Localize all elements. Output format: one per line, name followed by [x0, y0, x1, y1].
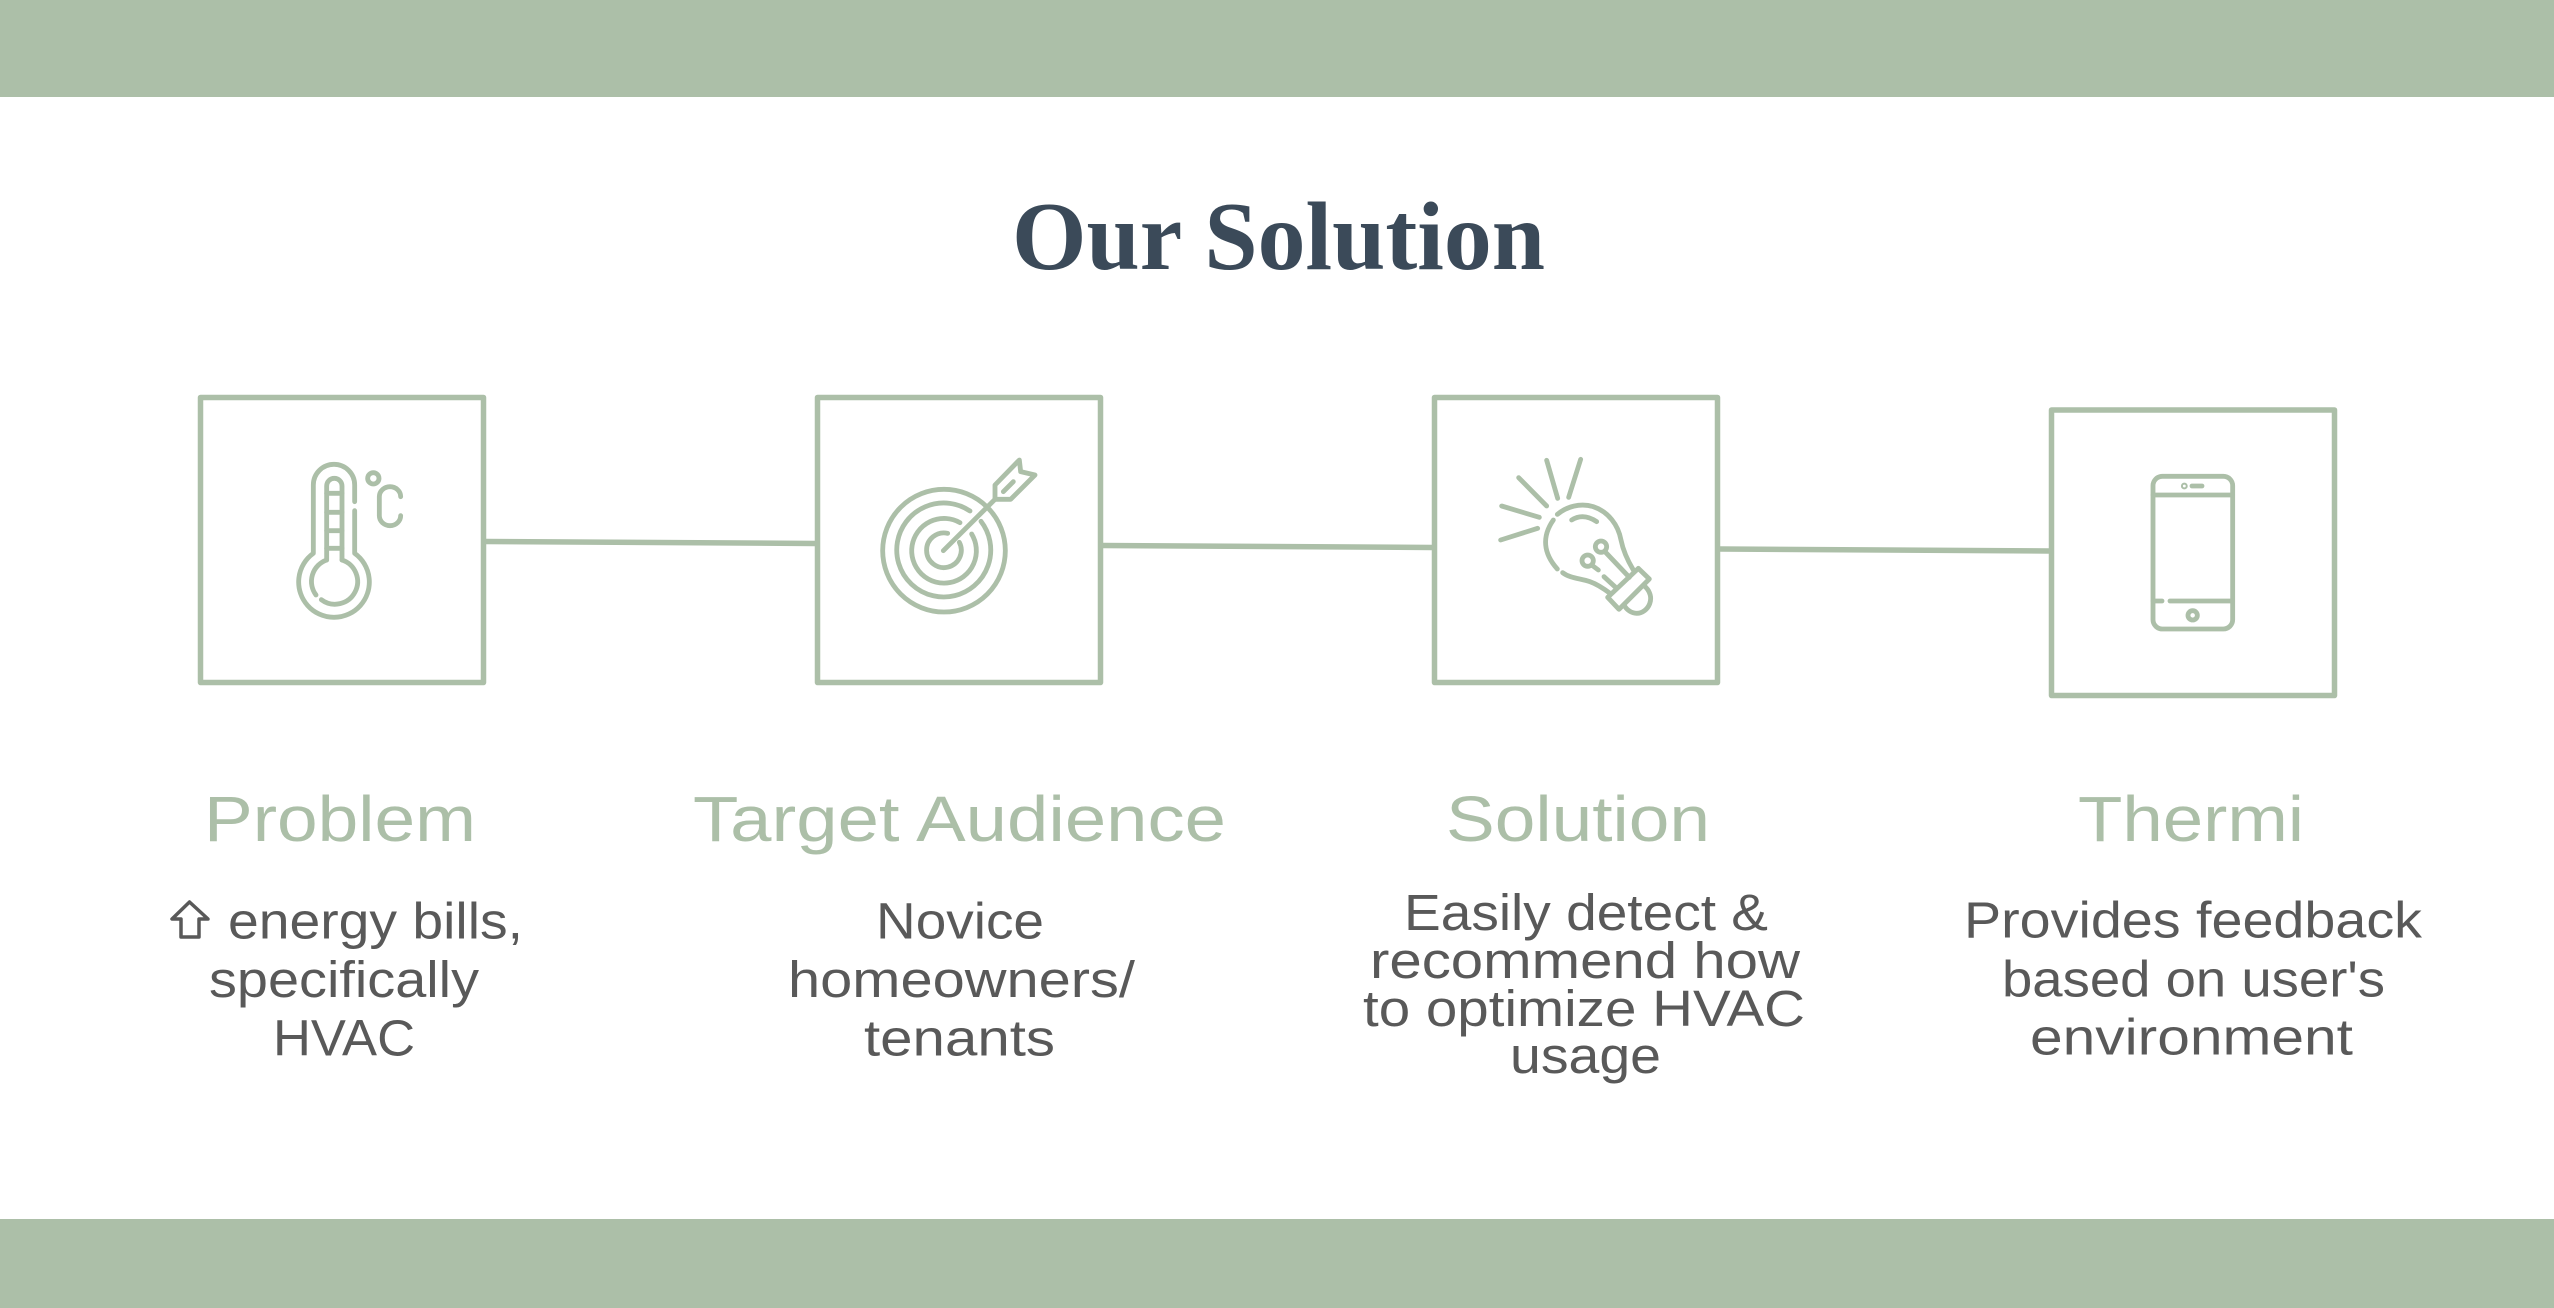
- thermi text: environment: [2030, 1008, 2353, 1066]
- panel: solution: [1363, 398, 1805, 1084]
- icon: light bulb: [1501, 459, 1651, 613]
- connector: target audience to solution: [1103, 546, 1432, 548]
- target audience text: [788, 892, 1136, 1066]
- thermi icon box: [2052, 410, 2334, 696]
- icon: up arrow: [172, 902, 208, 937]
- solution text: to optimize HVAC: [1363, 980, 1805, 1037]
- panel: problem: [172, 398, 523, 1066]
- bottom band: [0, 1219, 2554, 1308]
- problem text: [209, 892, 523, 1066]
- target audience text: Novice: [876, 892, 1044, 950]
- icon: target with arrow: [883, 460, 1035, 612]
- thermi text: [1964, 892, 2423, 1066]
- thermi heading: Thermi: [2078, 783, 2304, 855]
- icon: smartphone: [2153, 476, 2233, 629]
- panel: target audience: [693, 398, 1226, 1066]
- problem text: energy bills,: [228, 892, 523, 950]
- solution icon box: [1434, 398, 1718, 682]
- solution heading: Solution: [1446, 783, 1710, 855]
- solution text: usage: [1510, 1027, 1661, 1084]
- target audience text: homeowners/: [788, 951, 1136, 1008]
- connector: problem to target audience: [486, 542, 815, 544]
- panel: thermi: [1964, 410, 2423, 1066]
- problem text: specifically: [209, 951, 480, 1008]
- title: Our Solution: [1012, 183, 1545, 291]
- thermi text: based on user's: [2002, 950, 2385, 1008]
- target audience heading: Target Audience: [693, 783, 1226, 855]
- target audience text: tenants: [864, 1010, 1055, 1066]
- thermi text: Provides feedback: [1964, 892, 2423, 948]
- problem text: HVAC: [273, 1010, 415, 1066]
- icon: thermometer: [299, 464, 401, 617]
- top band: [0, 0, 2554, 97]
- connector: solution to thermi: [1720, 549, 2049, 551]
- problem icon box: [200, 398, 484, 682]
- problem heading: Problem: [204, 783, 476, 855]
- solution text: recommend how: [1370, 932, 1800, 989]
- target audience icon box: [818, 398, 1100, 682]
- solution text: Easily detect &: [1404, 884, 1768, 941]
- solution text: [1363, 884, 1805, 1084]
